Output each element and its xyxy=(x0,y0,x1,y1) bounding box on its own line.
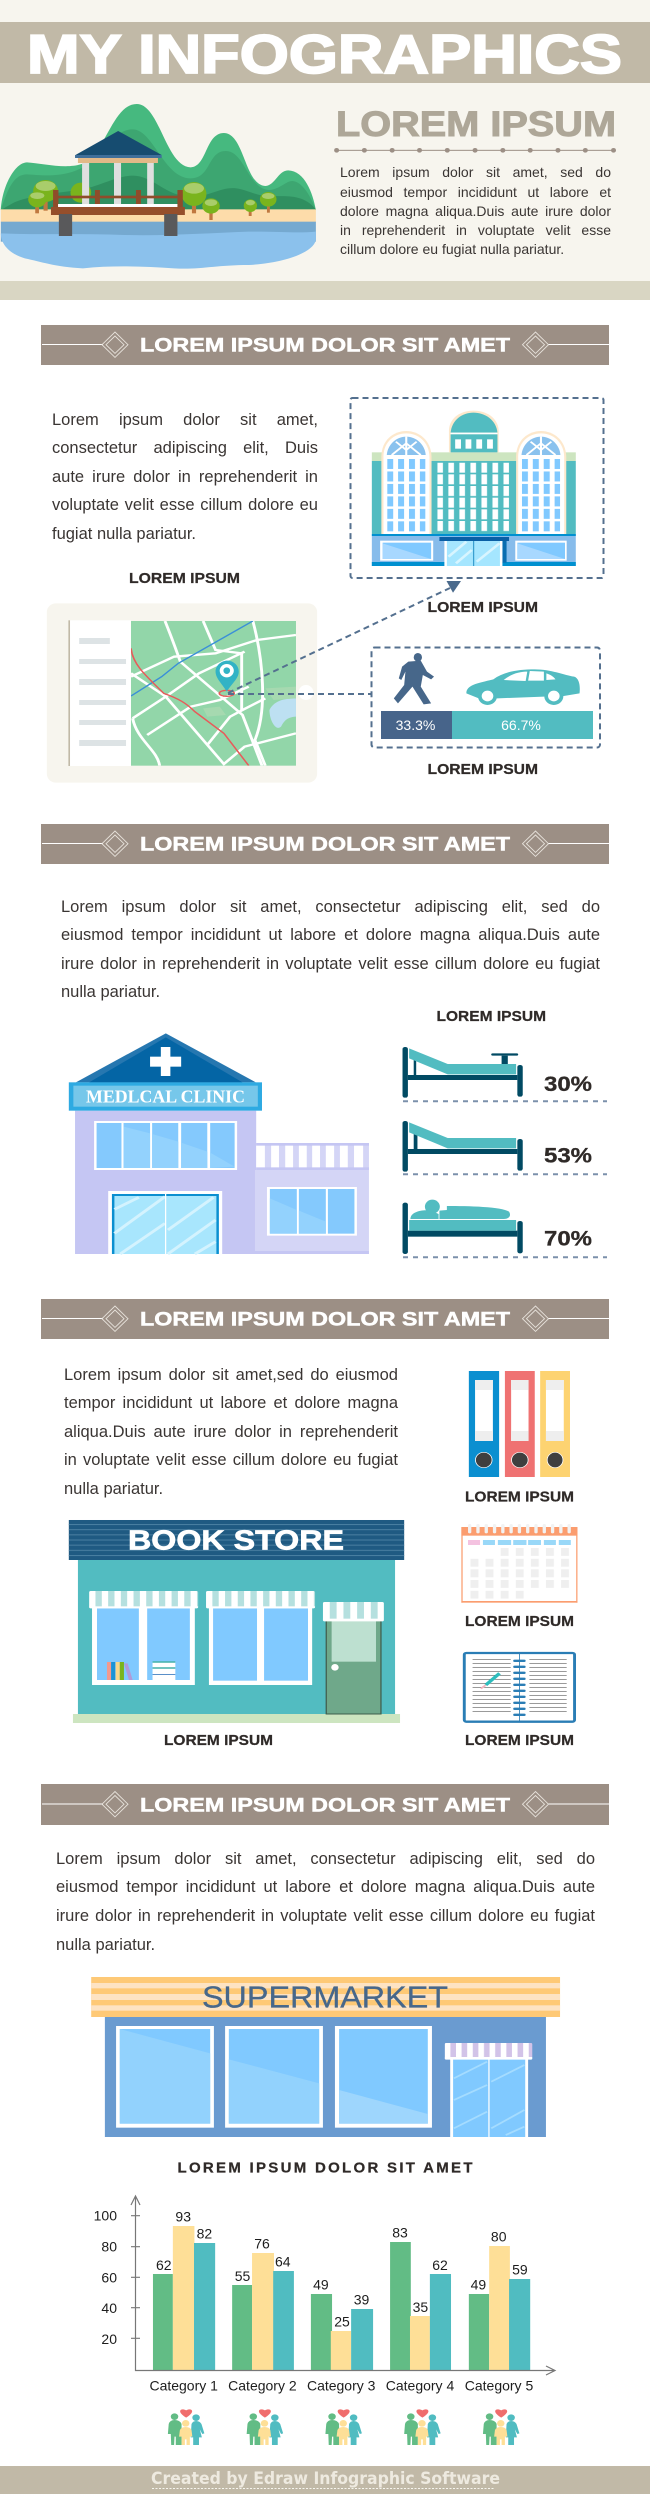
section 4 heading bar xyxy=(41,1784,609,1825)
section 4 heading bar: LOREM IPSUM DOLOR SIT AMET xyxy=(140,1796,510,1817)
arrow head xyxy=(446,581,461,593)
category labels: Category 5 xyxy=(465,2378,533,2394)
footer: Created by Edraw Infographic Software xyxy=(151,2469,500,2489)
text block: section 2 paragraph xyxy=(61,898,600,1001)
icon: car xyxy=(466,669,580,705)
text block: section 1 paragraph: voluptate velit esse cillum dolore eu xyxy=(52,496,318,514)
text block: header paragraph: cillum dolore eu fugiat nulla pariatur. xyxy=(340,241,564,257)
text block: section 4 paragraph xyxy=(56,1850,595,1954)
footer xyxy=(0,2466,650,2494)
y axis labels: 20 xyxy=(101,2331,117,2347)
section 2 heading bar xyxy=(41,824,609,864)
label: binders: LOREM IPSUM xyxy=(465,1488,574,1505)
value labels xyxy=(156,2209,528,2330)
label: map: LOREM IPSUM xyxy=(129,570,240,587)
text block: section 2 paragraph: nulla pariatur. xyxy=(61,983,160,1001)
illustration: lake pavilion and mountains xyxy=(1,104,316,269)
icon: bed 30% xyxy=(403,1047,523,1098)
transport box xyxy=(372,648,600,748)
value labels: 83 xyxy=(392,2225,408,2241)
chart bars xyxy=(153,2226,530,2370)
value labels: 59 xyxy=(512,2262,528,2278)
header background xyxy=(0,0,650,281)
text block: header paragraph: eiusmod tempor incididunt ut labore et xyxy=(340,184,611,200)
chart title: LOREM IPSUM DOLOR SIT AMET xyxy=(178,2160,472,2177)
section 3 heading bar: LOREM IPSUM DOLOR SIT AMET xyxy=(140,1310,510,1331)
bar chart xyxy=(94,2196,555,2394)
value labels: 62 xyxy=(156,2257,172,2273)
icon: bed with patient 70% xyxy=(403,1200,523,1254)
icon: bed 53% xyxy=(403,1121,523,1172)
tablet with map xyxy=(47,603,317,783)
label: calendar: LOREM IPSUM xyxy=(465,1613,574,1630)
value: 70%: 70% xyxy=(544,1228,592,1251)
text block: section 3 paragraph: aliqua.Duis aute irure dolor in reprehenderit xyxy=(64,1423,398,1441)
chart axes xyxy=(131,2196,555,2375)
text block: section 3 paragraph xyxy=(64,1366,398,1498)
icon: binders xyxy=(469,1371,570,1477)
section 1 heading bar xyxy=(41,325,609,365)
label: notebook: LOREM IPSUM xyxy=(465,1732,574,1749)
icon: medical clinic xyxy=(69,1033,369,1254)
text block: section 1 paragraph: Lorem ipsum dolor sit amet, xyxy=(52,411,318,429)
value labels: 25 xyxy=(334,2314,350,2330)
text block: section 1 paragraph: consectetur adipiscing elit, Duis xyxy=(52,439,318,457)
y axis labels: 100 xyxy=(94,2208,117,2224)
icon: building xyxy=(372,411,576,566)
icon: calendar xyxy=(461,1524,577,1603)
label: transport: LOREM IPSUM xyxy=(428,761,538,778)
building box xyxy=(350,398,604,578)
value labels: 55 xyxy=(235,2268,250,2284)
text block: section 1 paragraph: aute irure dolor in reprehenderit in xyxy=(52,468,318,486)
icon: supermarket xyxy=(91,1977,560,2137)
percentage bar: 33.3% xyxy=(396,717,435,733)
text block: header paragraph: dolore magna aliqua.Duis aute irure dolor xyxy=(340,203,611,219)
icon: walking person xyxy=(394,653,434,704)
category labels: Category 2 xyxy=(228,2378,297,2394)
icon: book store xyxy=(69,1520,404,1723)
label: beds: LOREM IPSUM xyxy=(436,1008,546,1025)
section 1 heading bar: LOREM IPSUM DOLOR SIT AMET xyxy=(140,336,510,357)
text block: section 3 paragraph: tempor incididunt ut labore et dolore magna xyxy=(64,1394,398,1412)
value labels: 76 xyxy=(254,2236,270,2252)
text block: section 1 paragraph: fugiat nulla pariatur. xyxy=(52,525,196,543)
icon: location pin xyxy=(216,661,239,696)
category labels: Category 3 xyxy=(307,2378,376,2394)
y axis labels: 60 xyxy=(101,2270,117,2286)
text block: header paragraph: in reprehenderit in voluptate velit esse xyxy=(340,222,611,238)
text block: header paragraph xyxy=(340,164,611,257)
title: MY INFOGRAPHICS xyxy=(27,23,622,85)
text block: section 2 paragraph: Lorem ipsum dolor sit amet, consectetur adipiscing elit, sed do xyxy=(61,898,600,916)
value labels: 49 xyxy=(313,2277,329,2293)
text block: section 1 paragraph xyxy=(52,411,318,543)
icon: supermarket: SUPERMARKET xyxy=(202,1979,448,2014)
value: 30%: 30% xyxy=(544,1073,592,1096)
label: building: LOREM IPSUM xyxy=(428,599,538,616)
value labels: 82 xyxy=(197,2226,212,2242)
value labels: 35 xyxy=(413,2299,428,2315)
y axis labels: 40 xyxy=(101,2300,117,2316)
dashed rules under beds xyxy=(403,1101,607,1257)
dashed connector lines from map xyxy=(228,588,450,700)
category labels xyxy=(149,2378,533,2394)
section 2 heading bar: LOREM IPSUM DOLOR SIT AMET xyxy=(140,835,510,856)
bottom band of header xyxy=(0,281,650,300)
value labels: 62 xyxy=(432,2257,448,2273)
value labels: 39 xyxy=(354,2292,369,2308)
text block: section 4 paragraph: irure dolor in reprehenderit in voluptate velit esse cillum dolore eu fugiat xyxy=(56,1907,595,1925)
category labels: Category 4 xyxy=(386,2378,454,2394)
section 3 heading bar xyxy=(41,1299,609,1339)
text block: header paragraph: Lorem ipsum dolor sit amet, sed do xyxy=(340,164,611,180)
label: book store: LOREM IPSUM xyxy=(164,1732,273,1749)
text block: section 2 paragraph: irure dolor in reprehenderit in voluptate velit esse cillum dolore eu fugiat xyxy=(61,955,600,973)
dotted divider xyxy=(334,148,616,153)
icon: medical clinic: MEDLCAL CLINIC xyxy=(86,1086,245,1106)
value labels: 64 xyxy=(275,2254,291,2270)
text block: section 3 paragraph: nulla pariatur. xyxy=(64,1480,163,1498)
text block: section 4 paragraph: nulla pariatur. xyxy=(56,1936,155,1954)
y axis labels: 80 xyxy=(101,2239,117,2255)
category labels: Category 1 xyxy=(149,2378,218,2394)
value: 53%: 53% xyxy=(544,1145,592,1168)
icon: notebook xyxy=(464,1653,575,1722)
text block: section 2 paragraph: eiusmod tempor incididunt ut labore et dolore magna aliqua.Duis aute xyxy=(61,926,600,944)
title banner xyxy=(0,22,650,85)
value labels: 80 xyxy=(491,2229,507,2245)
icon: book store: BOOK STORE xyxy=(128,1524,344,1555)
y axis labels xyxy=(94,2208,117,2347)
text block: section 3 paragraph: in voluptate velit esse cillum dolore eu fugiat xyxy=(64,1451,398,1469)
text block: section 4 paragraph: Lorem ipsum dolor sit amet, consectetur adipiscing elit, sed do xyxy=(56,1850,595,1868)
header subtitle: LOREM IPSUM xyxy=(336,105,616,144)
text block: section 3 paragraph: Lorem ipsum dolor sit amet,sed do eiusmod xyxy=(64,1366,398,1384)
text block: section 4 paragraph: eiusmod tempor incididunt ut labore et dolore magna aliqua.Duis aute xyxy=(56,1878,595,1896)
value labels: 93 xyxy=(175,2209,191,2225)
icons: family row xyxy=(168,2409,519,2445)
percentage bar: 66.7% xyxy=(501,717,541,733)
value labels: 49 xyxy=(471,2277,486,2293)
percentage bar xyxy=(381,711,593,739)
